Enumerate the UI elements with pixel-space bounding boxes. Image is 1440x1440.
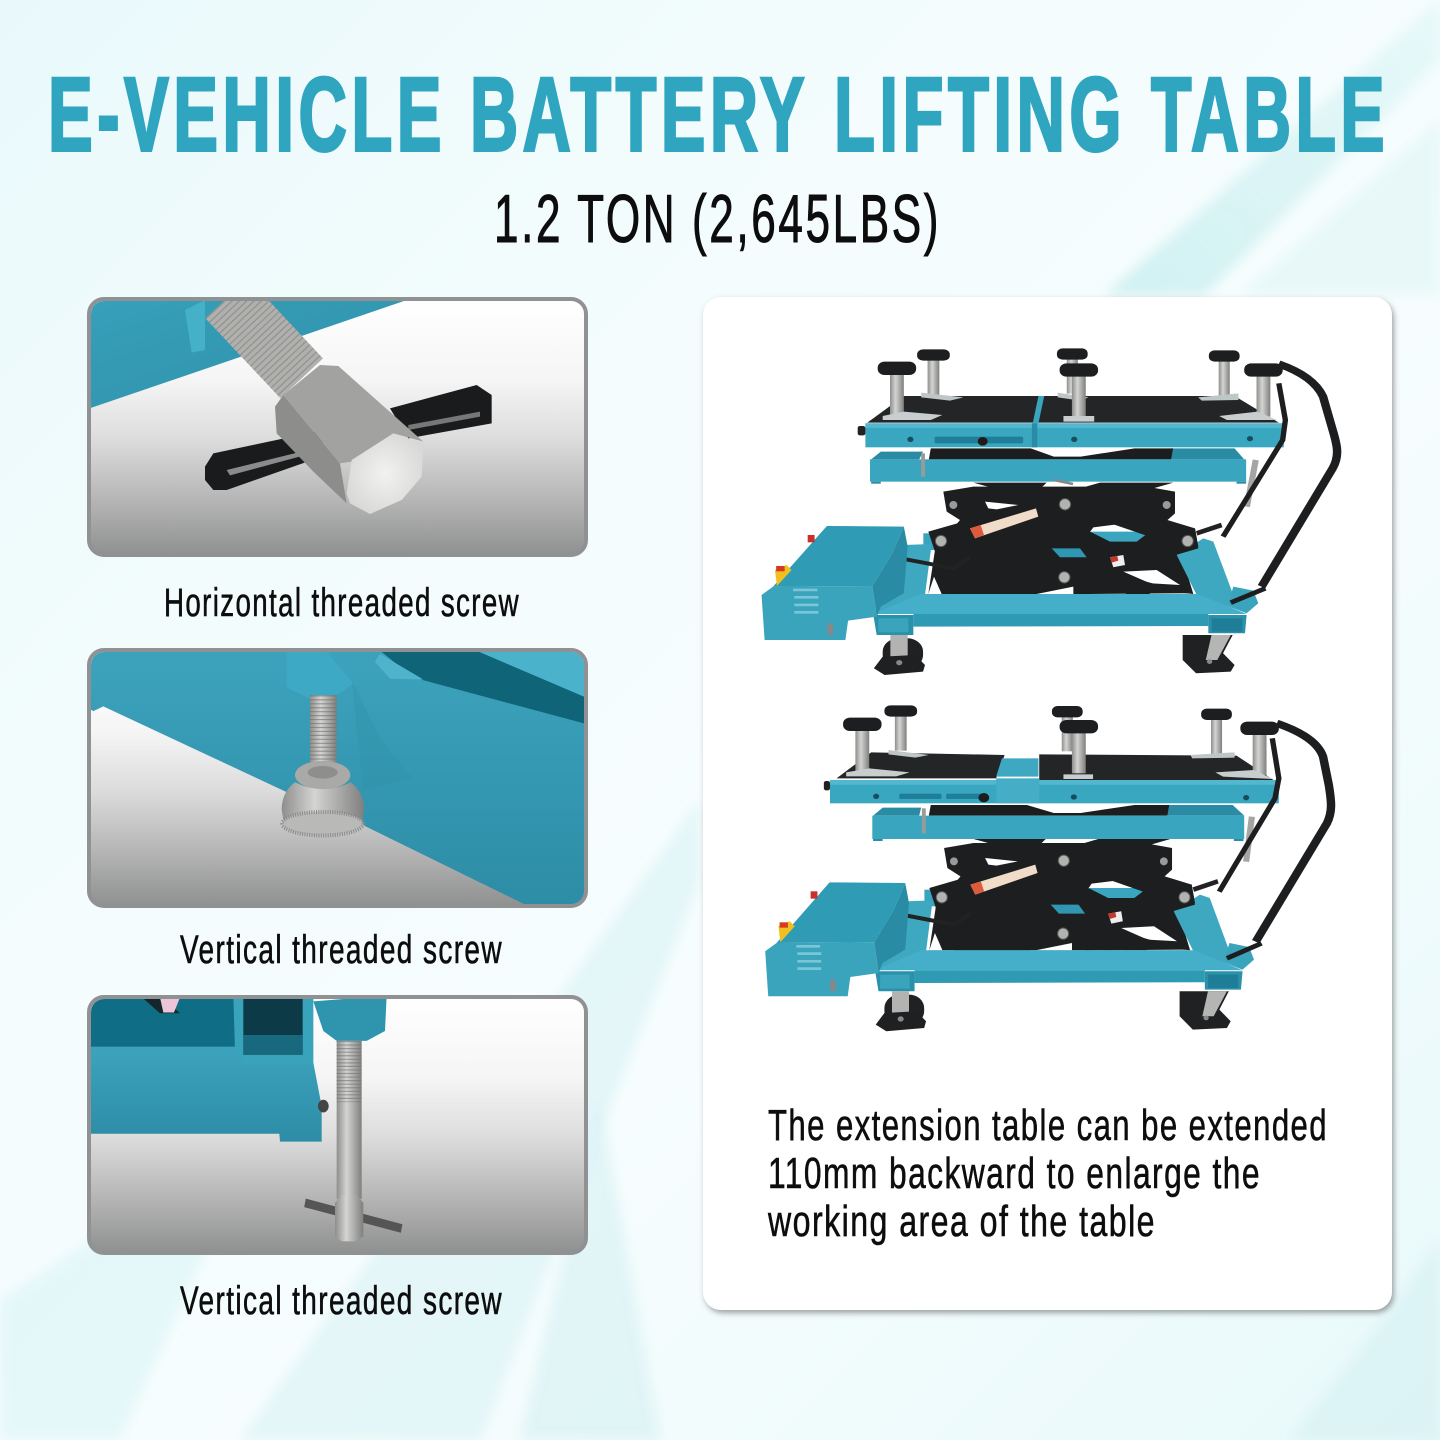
screw shaft — [310, 695, 337, 770]
T-bar — [305, 1203, 402, 1229]
lifting table: retracted — [762, 348, 1337, 675]
title: LIFTING — [834, 56, 1126, 174]
square tube end — [233, 996, 313, 1065]
panel: extension table card — [703, 297, 1392, 1310]
title: E-VEHICLE — [48, 56, 446, 174]
title: BATTERY — [470, 56, 809, 174]
panel: horizontal threaded screw photo — [87, 297, 586, 555]
black pin — [205, 385, 492, 490]
teal beam — [87, 648, 590, 909]
teal frame — [87, 297, 417, 409]
hex nut — [275, 365, 423, 514]
mount block — [287, 660, 353, 698]
subtitle: 1.2 TON (2,645LBS) — [494, 181, 941, 257]
teal beam — [87, 996, 322, 1142]
knurled knob — [282, 761, 364, 836]
lifting table: extended — [765, 705, 1331, 1031]
threaded bolt — [227, 298, 302, 378]
threaded shaft and nut — [335, 1041, 363, 1241]
caption: vertical threaded screw: Vertical threaded screw — [180, 928, 503, 972]
caption: horizontal threaded screw: Horizontal threaded screw — [164, 581, 520, 625]
title — [48, 56, 1389, 174]
panel: vertical threaded screw photo with knurled knob — [87, 648, 590, 909]
panel: vertical threaded screw photo with T-bar — [87, 996, 586, 1253]
extension table description: 110mm backward to enlarge the — [768, 1149, 1261, 1198]
collar — [313, 996, 387, 1041]
bolt side — [318, 1100, 329, 1112]
caption: vertical threaded screw 2: Vertical threaded screw — [180, 1279, 503, 1323]
extension table description — [767, 1101, 1328, 1246]
extension table description: working area of the table — [767, 1197, 1156, 1246]
